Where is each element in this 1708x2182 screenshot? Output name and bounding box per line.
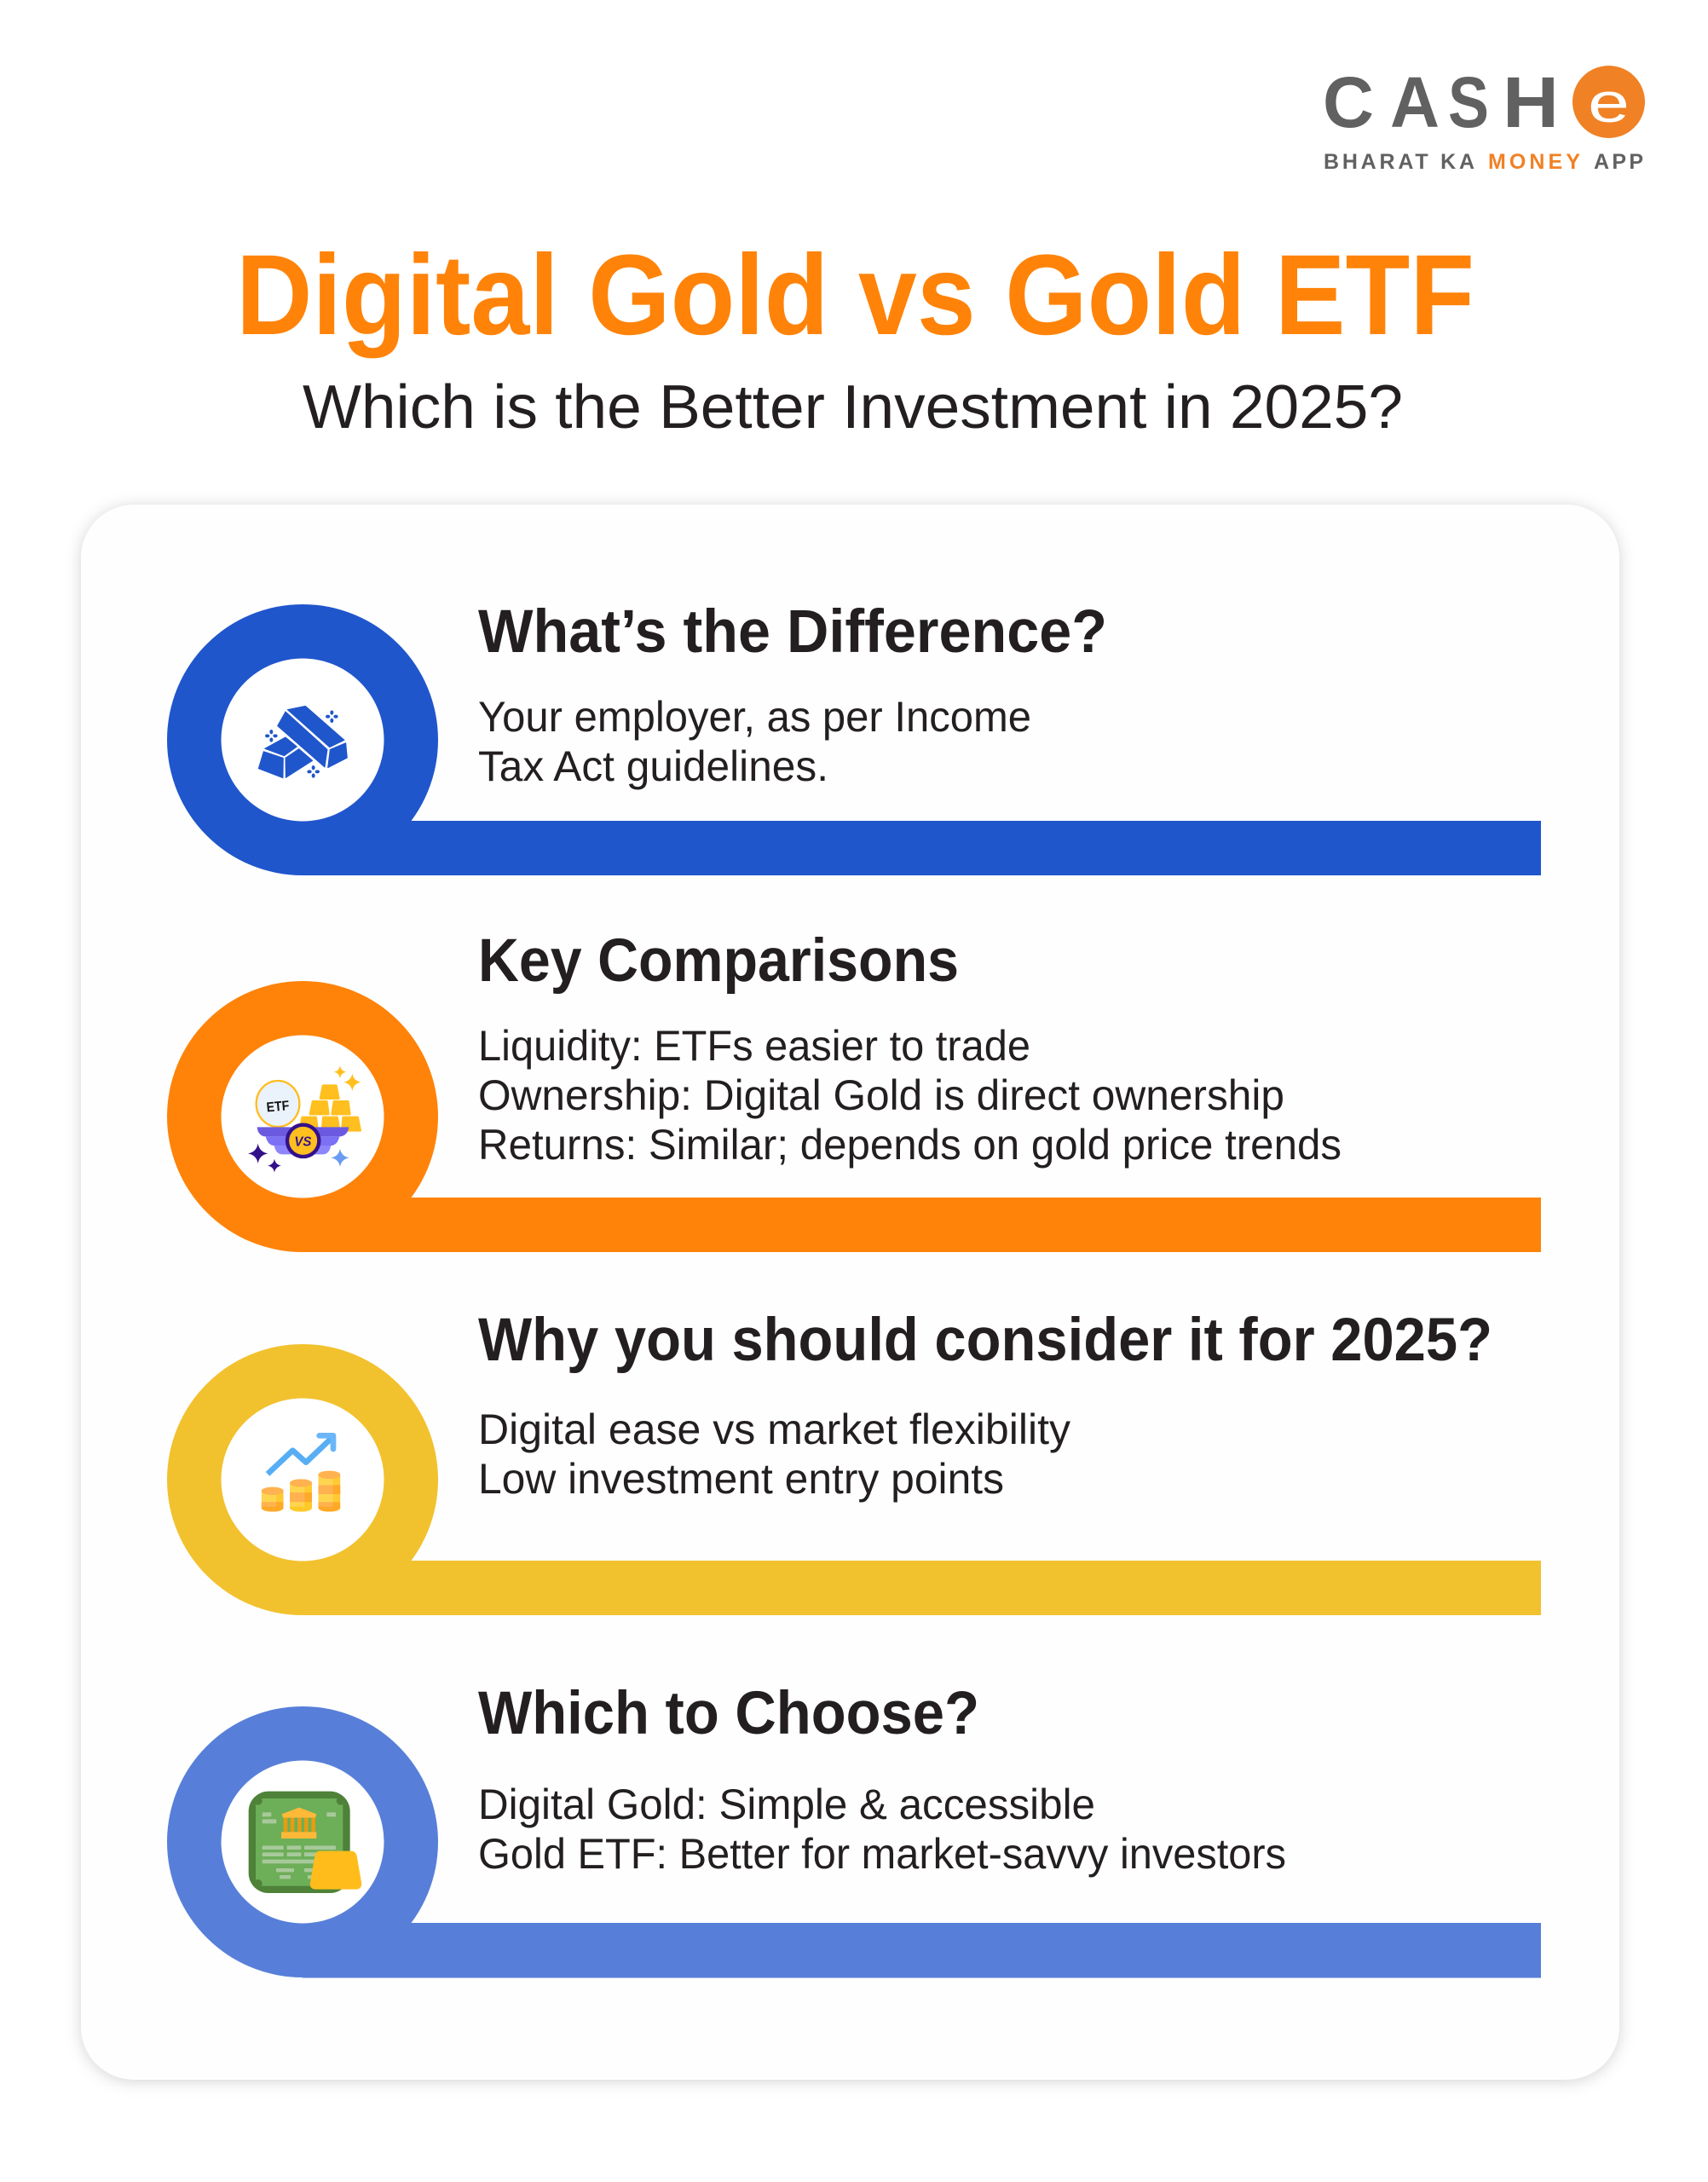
body text: comparisons: Liquidity: ETFs easier to trade [478, 1022, 1030, 1070]
ring and bar: orange [167, 981, 1541, 1252]
logo wordmark: S [1448, 62, 1489, 142]
body text: difference [478, 693, 1031, 790]
icon: ETF vs gold: ETF [266, 1099, 290, 1115]
ring and bar: blue [167, 604, 1541, 875]
heading: why consider: Why you should consider it for 2025? [478, 1307, 1492, 1374]
panel: key comparisons [167, 927, 1541, 1252]
icon: rising chart and coins [262, 1435, 340, 1514]
panel: comparison card [81, 505, 1619, 2080]
logo wordmark: A [1390, 62, 1440, 142]
body text: which to choose: Gold ETF: Better for market-savvy investors [478, 1830, 1286, 1878]
title: Digital Gold vs Gold ETF [236, 232, 1474, 359]
logo orange circle with e [1572, 66, 1645, 138]
body text: difference: Tax Act guidelines. [478, 742, 828, 790]
icon: certificate and gold bar [249, 1792, 361, 1893]
heading: key comparisons: Key Comparisons [478, 927, 959, 995]
body text: which to choose [478, 1781, 1286, 1878]
panel: what's the difference [167, 598, 1541, 875]
icon: gold bars [258, 706, 347, 778]
logo wordmark: H [1503, 62, 1559, 142]
card background [81, 505, 1619, 2080]
body text: why consider: Low investment entry points [478, 1455, 1004, 1503]
body text: comparisons [478, 1022, 1342, 1169]
icon: ETF vs gold: VS [294, 1134, 312, 1149]
logo tagline: APP [1594, 150, 1643, 174]
logo tagline [1324, 150, 1643, 174]
heading: what's the difference: What’s the Difference? [478, 598, 1107, 666]
panel: which to choose [167, 1680, 1541, 1977]
body text: difference: Your employer, as per Income [478, 693, 1031, 741]
body text: comparisons: Returns: Similar; depends on gold price trends [478, 1121, 1342, 1169]
body text: which to choose: Digital Gold: Simple & accessible [478, 1781, 1095, 1828]
body text: why consider: Digital ease vs market flexibility [478, 1406, 1070, 1453]
logo orange circle with e: e [1588, 71, 1630, 134]
icon: ETF vs gold [248, 1065, 361, 1173]
logo wordmark: C [1323, 62, 1374, 142]
logo: CASHe [1323, 62, 1645, 174]
logo tagline: MONEY [1488, 150, 1580, 174]
body text: comparisons: Ownership: Digital Gold is direct ownership [478, 1071, 1284, 1119]
logo tagline: BHARAT KA [1324, 150, 1474, 174]
ring and bar: yellow [167, 1344, 1541, 1615]
panel: why consider [167, 1307, 1541, 1615]
ring and bar: periwinkle [167, 1706, 1541, 1977]
subtitle: Which is the Better Investment in 2025? [303, 373, 1403, 442]
heading: which to choose: Which to Choose? [478, 1680, 979, 1747]
logo wordmark [1323, 62, 1559, 142]
body text: why consider [478, 1406, 1070, 1503]
